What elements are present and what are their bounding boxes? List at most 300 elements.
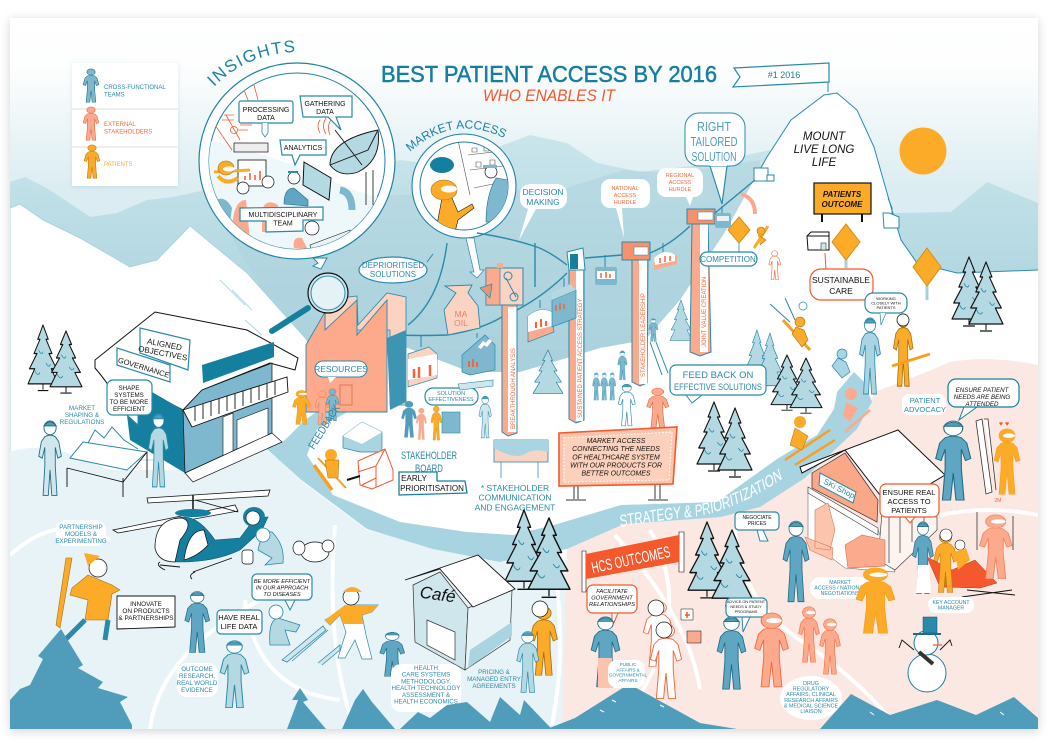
- callout: facilitate government: RELATIONSHIPS: [589, 602, 635, 608]
- curved arrow on slope: [741, 194, 755, 214]
- figure: big orange patient: [856, 568, 895, 633]
- figure pink climber: [769, 251, 781, 280]
- figure: tablet user: [380, 632, 405, 676]
- callout: sustainable care: CARE: [829, 286, 853, 296]
- market access heading: MARKET ACCESS: [406, 120, 506, 152]
- sign: governance: GOVERNANCE: [117, 356, 171, 380]
- table model: [67, 427, 147, 497]
- skier orange high: [754, 226, 768, 248]
- insights bubble: [199, 63, 395, 269]
- callout: competition: COMPETITION: [700, 255, 756, 264]
- text: health care systems: HEALTH TECHNOLOGY: [392, 685, 460, 692]
- text: health care systems: ASSESSMENT &: [402, 692, 451, 699]
- text: market access national: [810, 577, 870, 599]
- legend label: cross-functional teams: CROSS-FUNCTIONAL: [104, 85, 166, 91]
- callout: regional access hurdle: REGIONAL: [666, 173, 694, 179]
- callout: ensure patient needs: NEEDS ARE BEING: [954, 394, 1010, 401]
- callout: innovate: [117, 596, 175, 629]
- striped flag: [687, 631, 701, 643]
- dark side wall: [127, 392, 185, 473]
- callout: shape systems: EFFICIENT: [113, 406, 145, 413]
- analyst: [284, 172, 308, 206]
- callout: regional access hurdle: HURDLE: [669, 187, 692, 193]
- text: partnership models: [55, 520, 107, 546]
- ground step: [185, 433, 282, 482]
- callout: decision making: [519, 184, 567, 240]
- sky: [10, 88, 1038, 217]
- figures: officials with flags: [643, 600, 701, 698]
- shop roof: [800, 430, 945, 495]
- legend figure: external stakeholders: [83, 107, 99, 140]
- lower-right pink ground: [562, 359, 1038, 729]
- snow slope and Mount Live Long Life: [310, 94, 1038, 460]
- mount label: MOUNT: [803, 131, 845, 143]
- mount label: LIVE LONG: [794, 144, 854, 156]
- callout: ensure patient needs: [948, 379, 1019, 420]
- callout: ensure real access: ACCESS TO: [887, 497, 931, 506]
- callout: gathering data: DATA: [316, 109, 334, 116]
- figure: woman at chalet: [149, 414, 169, 487]
- distant mountains: [10, 135, 1038, 372]
- figure: key account manager: [913, 522, 933, 593]
- callout: ensure patient needs: ENSURE PATIENT: [956, 387, 1008, 394]
- snow marks on ridge: [600, 700, 1004, 715]
- callout: facilitate government: GOVERNMENT: [591, 596, 633, 602]
- callout: gathering data: [300, 96, 352, 130]
- figure: advocate: [936, 421, 971, 500]
- legend label: patients: PATIENTS: [104, 162, 132, 168]
- subtitle: WHO ENABLES IT: [483, 86, 616, 105]
- snowmobile: [927, 557, 1015, 597]
- figure: pink standing with poles: [977, 512, 1013, 579]
- callout: early prioritisation: EARLY: [401, 474, 427, 483]
- callout: shape systems: [107, 380, 152, 425]
- stakeholder board group: [401, 401, 460, 440]
- text: drug regulatory: LIAISON: [800, 709, 822, 715]
- figure: man at table: [39, 421, 61, 495]
- callout: advice on patient needs: ADVICE ON PATIENT: [727, 599, 765, 604]
- skier blue: [832, 349, 850, 378]
- height label: 2M: [995, 498, 1001, 504]
- banner: HCS outcomes: HCS OUTCOMES: [590, 544, 672, 577]
- tower: stakeholder leadership: [622, 242, 650, 386]
- callout: negotiate prices: [735, 512, 779, 541]
- beaver: [293, 540, 334, 562]
- callout: negotiate prices: PRICES: [748, 521, 767, 527]
- gondola: white crate: [408, 335, 437, 387]
- satellite dish: [330, 130, 379, 210]
- callout: ensure real access: ENSURE REAL: [883, 488, 935, 497]
- callout: sustainable care: [810, 253, 873, 300]
- callout: feedback on effective solutions: FEED BACK ON: [683, 370, 753, 381]
- text: market shaping: REGULATIONS: [60, 419, 104, 426]
- factory: resources: [306, 293, 406, 412]
- stakeholders group: [216, 176, 278, 240]
- trees at river left: [505, 510, 570, 597]
- gondola: centre: [595, 255, 617, 285]
- tower: breakthrough analysis: BREAKTHROUGH ANALYSIS: [511, 348, 517, 429]
- mountain outline: [754, 93, 1038, 273]
- chalet: [95, 312, 298, 482]
- stakeholder board label: STAKEHOLDER: [401, 450, 457, 462]
- figure: orange family on sled: [934, 529, 970, 592]
- gondola: orange right: [654, 243, 677, 270]
- callout: sustainable care: SUSTAINABLE: [812, 275, 870, 285]
- cafe: [405, 555, 515, 670]
- stakeholder chart board: [494, 440, 548, 478]
- pharmacist: [486, 178, 510, 222]
- text: health care systems: CARE SYSTEMS: [402, 672, 450, 679]
- sign: market access connecting: MARKET ACCESS: [587, 438, 645, 445]
- callout: decision making: MAKING: [526, 197, 560, 207]
- callout: working closely with patients: WORKING: [876, 296, 896, 301]
- callout: multidisciplinary team: MULTIDISCIPLINARY: [249, 212, 317, 219]
- text: health care systems: [391, 664, 461, 712]
- feedback label: FEEDBACK: [306, 402, 343, 452]
- tower: sustained patient access strategy: [567, 248, 585, 423]
- text: drug regulatory: [780, 676, 842, 720]
- text: outcome research: REAL WORLD: [177, 680, 218, 687]
- text: outcome research: [177, 663, 218, 697]
- ski shop sign text: SKi Shop: [822, 477, 857, 501]
- shop items: [805, 503, 835, 560]
- tower: stakeholder leadership: STAKEHOLDER LEADERSHIP: [641, 293, 647, 377]
- cafe sign: Café: [419, 583, 457, 606]
- speech blob: [430, 157, 454, 173]
- nearer mountain shading: [386, 160, 760, 204]
- callout: regional access hurdle: ACCESS: [669, 180, 692, 186]
- sign: market access connecting: [559, 427, 677, 500]
- callout: processing data: PROCESSING: [243, 107, 289, 114]
- text: stakeholder communication: * STAKEHOLDER: [481, 483, 549, 493]
- tree row: [287, 688, 326, 729]
- soft backdrop: [205, 140, 391, 260]
- text: public affairs: AFFAIRS &: [616, 667, 640, 672]
- snow paths: [10, 510, 1038, 729]
- callout: working closely with patients: PATIENTS: [877, 305, 896, 310]
- callout: national access hurdle: HURDLE: [614, 200, 637, 206]
- ridge right: [820, 694, 1038, 729]
- blue box: [343, 422, 382, 452]
- bubble arrow to lift: [466, 238, 484, 278]
- white left mountain: [10, 204, 320, 460]
- dark roof band: [202, 342, 274, 383]
- title: BEST PATIENT ACCESS BY 2016: [381, 61, 717, 87]
- figure: orange patient by skis: [994, 429, 1020, 494]
- callout: innovate: & PARTNERSHIPS: [118, 615, 174, 622]
- insights heading: INSIGHTS: [207, 40, 294, 86]
- trees: right of mount: [952, 257, 1003, 331]
- oil bottle: MA oil: OIL: [454, 318, 468, 328]
- text: key account manager: [928, 597, 974, 613]
- callout: deprioritised solutions: DEPRIORITISED: [362, 261, 424, 270]
- sign: market access connecting: OF HEALTHCARE SYSTEM: [572, 454, 660, 461]
- callout: ensure real access: [880, 484, 939, 523]
- lower-left pale ground: [10, 448, 570, 729]
- gondola: orange left: [528, 300, 554, 342]
- skis on ground: [282, 626, 340, 665]
- text: market access national: MARKET: [829, 580, 851, 586]
- text: patient advocacy: ADVOCACY: [904, 405, 946, 414]
- text: outcome research: OUTCOME: [181, 666, 213, 673]
- figure: mechanic crouching: [242, 528, 283, 565]
- mount label: LIFE: [812, 157, 836, 169]
- shelves: [458, 140, 512, 195]
- data scribbles: [215, 85, 332, 150]
- people by sign: [593, 319, 669, 428]
- orange skier with key: [314, 449, 360, 490]
- monitor: [303, 162, 331, 200]
- callout: competition: [700, 252, 757, 266]
- ski shop: [800, 430, 945, 572]
- market access bubble: [412, 134, 516, 238]
- text: public affairs: GOVERNMENTAL: [609, 673, 648, 678]
- figure: orange coat woman: [325, 587, 378, 659]
- callout: be more efficient: BE MORE EFFICIENT: [254, 579, 310, 585]
- callout: be more efficient: IN OUR APPROACH: [256, 586, 309, 592]
- callout: multidisciplinary team: TEAM: [273, 220, 293, 228]
- legend label: external stakeholders: EXTERNAL: [104, 122, 136, 128]
- text: market shaping: SHAPING &: [65, 412, 100, 419]
- shop pink wall: [812, 453, 878, 522]
- tower: sustained patient access strategy: SUSTAINED PATIENT ACCESS STRATEGY: [578, 299, 584, 418]
- callout: have real life data: HAVE REAL: [218, 613, 260, 622]
- callout: early prioritisation: PRIORITISATION: [400, 484, 464, 493]
- callout: innovate: INNOVATE: [130, 601, 162, 608]
- balcony: [183, 377, 288, 427]
- text: drug regulatory: AFFAIRS, CLINICAL: [786, 692, 836, 698]
- callout: national access hurdle: ACCESS: [614, 193, 637, 199]
- front wall: [183, 363, 272, 473]
- sun: [900, 128, 946, 174]
- river: strategy and prioritization: [267, 372, 872, 562]
- text: pricing: AGREEMENTS: [472, 683, 516, 690]
- jackets on display: [845, 535, 885, 568]
- patient figure: [214, 161, 250, 182]
- callout: gathering data: GATHERING: [304, 101, 346, 108]
- sign: aligned objectives: [137, 328, 190, 370]
- figure: pink standing patient: [755, 613, 788, 687]
- figure: reader: [220, 641, 249, 708]
- magnifying glass: [272, 273, 348, 331]
- callout: analytics: [280, 140, 326, 165]
- sign: aligned objectives: ALIGNED: [146, 337, 183, 352]
- orange skier in river: [785, 416, 835, 465]
- gondola: blue left: [551, 278, 576, 327]
- banner: HCS outcomes: [582, 532, 684, 592]
- callout: right tailored solution: TAILORED: [690, 134, 738, 149]
- text: outcome research: RESEARCH,: [179, 673, 215, 680]
- ski lift cables: [397, 180, 755, 336]
- text: key account manager: MANAGER: [938, 606, 964, 612]
- summit flag: [733, 63, 829, 92]
- figure: orange skier carrying skis: [56, 553, 120, 640]
- callout: right tailored solution: SOLUTION: [692, 149, 736, 164]
- callout: national access hurdle: [601, 179, 650, 238]
- sign: patients outcome: [814, 183, 871, 222]
- front door columns: [223, 408, 268, 467]
- callout: feedback on effective solutions: EFFECTIVE SOLUTIONS: [674, 382, 762, 393]
- snow roof: [95, 312, 298, 415]
- text: health care systems: HEALTH ECONOMICS: [394, 698, 458, 706]
- callout: working closely with patients: [865, 293, 907, 325]
- lower worker: [294, 221, 350, 254]
- red crate: [358, 449, 393, 489]
- figure: researcher: [185, 592, 210, 652]
- text: market access national: ACCESS / NATIONAL: [814, 586, 866, 592]
- figure: negotiator: [783, 521, 809, 602]
- small hut: [807, 232, 829, 250]
- figure: medical blue: [717, 617, 746, 689]
- callout: national access hurdle: NATIONAL: [611, 186, 639, 192]
- callout: have real life data: LIFE DATA: [221, 622, 257, 631]
- text: pricing: MANAGED ENTRY: [467, 676, 521, 683]
- callout: facilitate government: [587, 585, 637, 627]
- callout: decision making: DECISION: [522, 187, 564, 197]
- gondola: blue crate: [462, 333, 495, 375]
- diamond sign: right: [913, 248, 941, 300]
- tower: joint value creation: [687, 209, 715, 356]
- text: drug regulatory: REGULATORY: [793, 687, 830, 693]
- skis upright: [976, 419, 996, 494]
- legend figure: cross-functional teams: [83, 69, 99, 102]
- river label: STRATEGY & PRIORITIZATION: [620, 468, 782, 526]
- eave band: [808, 487, 878, 535]
- legend label: cross-functional teams: TEAMS: [104, 92, 125, 98]
- ski shop sign: [819, 473, 856, 503]
- figure: crouching clinician: [269, 605, 300, 645]
- ridge centre: [547, 684, 737, 729]
- trees black by river: [771, 355, 822, 413]
- upper lift station: [754, 168, 774, 181]
- callout: right tailored solution: [685, 113, 745, 204]
- callout: shape systems: SYSTEMS: [114, 392, 144, 399]
- text: market access national: NEGOTIATIONS: [821, 591, 860, 597]
- sign: market access connecting: WITH OUR PRODUCTS FOR: [570, 462, 662, 469]
- callout: advice on patient needs: [726, 598, 767, 632]
- callout: deprioritised solutions: SOLUTIONS: [370, 270, 416, 279]
- callout: ensure patient needs: ATTENDED: [965, 401, 999, 408]
- text: partnership models: PARTNERSHIP: [59, 524, 103, 531]
- stakeholder board label line 2: BOARD: [415, 463, 443, 475]
- callout: feedback on effective solutions: [670, 365, 766, 403]
- pink skier in river: [843, 388, 870, 432]
- trees on slope: [533, 300, 783, 393]
- text: public affairs: AFFAIRS: [618, 678, 638, 683]
- callout: advice on patient needs: PROGRAMS: [735, 609, 758, 614]
- patient: [436, 198, 474, 232]
- shop right wall: [878, 513, 937, 570]
- trees by HCS banner: [688, 522, 752, 606]
- figures at factory: [292, 389, 339, 424]
- callout: working closely with patients: CLOSELY WITH: [871, 301, 901, 306]
- callout: advice on patient needs: NEEDS & STUDY: [730, 604, 762, 609]
- sign: market access connecting: BETTER OUTCOMES: [582, 470, 651, 478]
- text: stakeholder communication: COMMUNICATION: [478, 492, 552, 502]
- gondola: upper blue: [715, 206, 731, 228]
- shop lower display: [808, 490, 895, 572]
- text: health care systems: HEALTH: [414, 665, 438, 672]
- figures: working closely pair: [860, 314, 930, 394]
- legend: [72, 63, 178, 186]
- text: drug regulatory: RESEARCH AFFAIRS: [784, 698, 838, 704]
- callout: innovate: ON PRODUCTS: [122, 608, 170, 615]
- dark foreground trees left: [10, 629, 1038, 729]
- summit hut: [883, 198, 899, 228]
- callout: facilitate government: FACILITATE: [596, 589, 628, 595]
- tower: joint value creation: JOINT VALUE CREATION: [702, 277, 708, 347]
- text: public affairs: PUBLIC: [620, 662, 636, 667]
- legend label: external stakeholders: STAKEHOLDERS: [104, 130, 152, 136]
- callout: shape systems: TO BE MORE: [110, 399, 148, 406]
- red cross flag: [681, 609, 693, 620]
- diamond sign: difficulty: [832, 224, 860, 268]
- diamond sign: lower: [728, 217, 750, 252]
- helicopter: [113, 490, 270, 579]
- callout: be more efficient: TO DISEASES: [263, 592, 301, 598]
- slope lines: [220, 280, 262, 335]
- figures: orange elf and blue colleague: [517, 601, 557, 692]
- text: drug regulatory: DRUG: [803, 681, 819, 687]
- figures: seated pink stakeholders: [799, 607, 840, 674]
- callout: early prioritisation: [399, 472, 467, 495]
- legend figure: patients: [84, 145, 100, 178]
- sign: market access connecting: CONNECTING THE NEEDS: [572, 446, 660, 453]
- summit flag: #1 2016: [768, 70, 800, 80]
- callout: solution effectiveness: EFFECTIVENESS: [428, 397, 474, 403]
- callout: shape systems: SHAPE: [119, 385, 139, 392]
- text: patient advocacy: PATIENT: [910, 396, 940, 405]
- callout: solution effectiveness: [425, 388, 478, 405]
- callout: processing data: [239, 101, 293, 137]
- factory: resources: RESOURCES: [314, 364, 368, 374]
- callout: regional access hurdle: [657, 168, 703, 206]
- text: key account manager: KEY ACCOUNT: [932, 600, 970, 606]
- decision machine: [480, 263, 523, 305]
- text: partnership models: MODELS &: [65, 531, 98, 538]
- callout: solution effectiveness: SOLUTION: [437, 391, 465, 397]
- text: drug regulatory: & MEDICAL SCIENCE: [784, 703, 839, 709]
- text: public affairs: [608, 660, 648, 688]
- callout: processing data: DATA: [257, 115, 275, 122]
- callout: multidisciplinary team: [240, 207, 323, 232]
- callout: right tailored solution: RIGHT: [697, 119, 731, 134]
- callout: be more efficient: [252, 574, 312, 610]
- text: market shaping: MARKET: [69, 405, 95, 412]
- snowman: [899, 617, 952, 692]
- callout: deprioritised solutions: [359, 254, 433, 283]
- sign: aligned objectives: OBJECTIVES: [137, 344, 188, 363]
- text: health care systems: METHODOLOGY,: [401, 678, 451, 685]
- text: outcome research: EVIDENCE: [181, 687, 213, 694]
- sign: patients outcome: PATIENTS: [823, 190, 861, 199]
- tower: breakthrough analysis: [502, 305, 517, 436]
- callout: negotiate prices: NEGOCIATE: [742, 515, 772, 521]
- callout: have real life data: [217, 610, 262, 634]
- person with clipboard: [479, 396, 491, 438]
- trees far left: [28, 325, 82, 393]
- sign: patients outcome: OUTCOME: [822, 200, 863, 209]
- oil bottle: MA oil: [444, 285, 480, 335]
- board: [234, 143, 268, 186]
- text: stakeholder communication: AND ENGAGEMENT: [475, 502, 555, 512]
- callout: ensure real access: PATIENTS: [891, 506, 927, 515]
- trees by river centre: [697, 402, 752, 477]
- hearts: ♥ ♥: [999, 421, 1009, 428]
- ski rack: [458, 380, 493, 390]
- text: patient advocacy: [902, 394, 946, 415]
- text: partnership models: EXPERIMENTING: [55, 538, 107, 545]
